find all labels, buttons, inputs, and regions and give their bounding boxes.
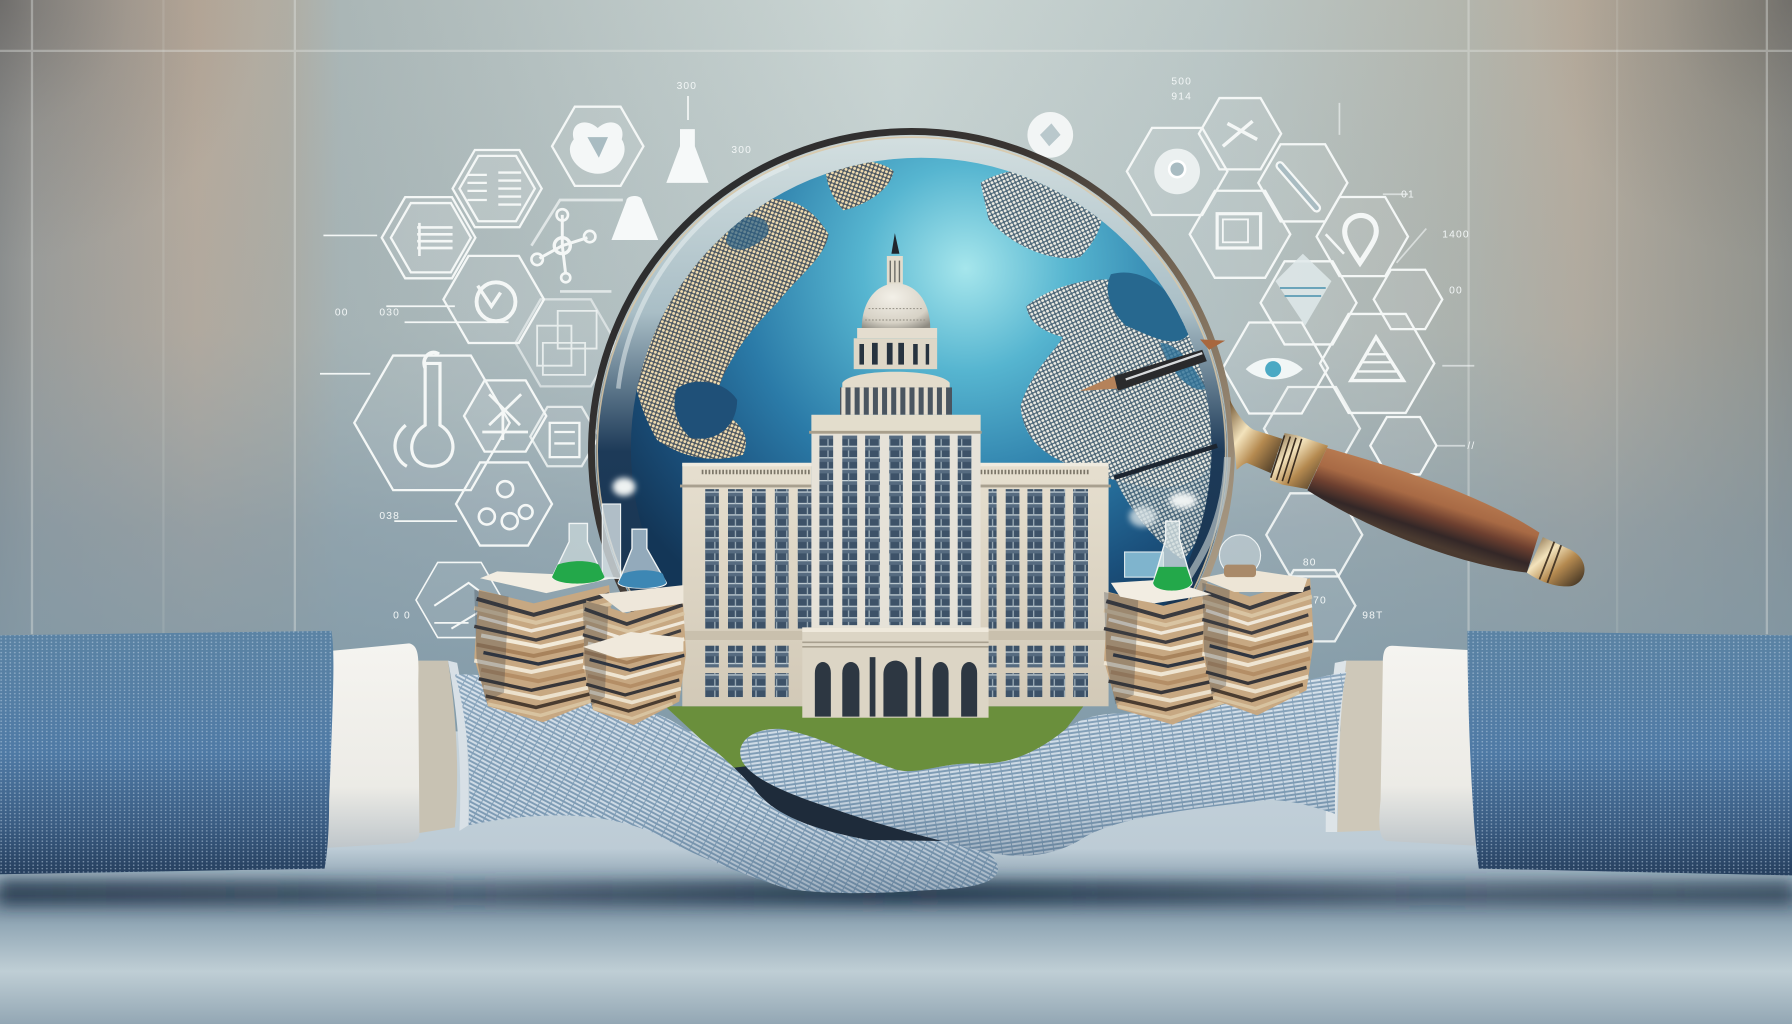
left lab glassware bbox=[552, 478, 666, 588]
hexagon: lower left bbox=[416, 562, 503, 638]
connector lines and labels right: 80 bbox=[1303, 558, 1317, 569]
hexagon: molecule cluster icon bbox=[456, 462, 552, 546]
hexagon: funnel icon bbox=[1261, 254, 1357, 344]
connector lines and labels right bbox=[1171, 77, 1475, 621]
dark gap between hands bbox=[731, 754, 1006, 857]
connector lines and labels right: 970 bbox=[1306, 595, 1327, 606]
smoke bbox=[1169, 493, 1197, 509]
hexagon: gauge icon bbox=[443, 256, 544, 343]
left paper stacks bbox=[474, 571, 686, 725]
gold neck bbox=[1230, 400, 1282, 473]
icon: white round badge bbox=[1027, 112, 1073, 158]
hexagon: upper right small bbox=[1374, 270, 1442, 329]
green flask bbox=[552, 523, 605, 584]
sea patch west bbox=[674, 382, 737, 439]
right hexagon icon network bbox=[1027, 77, 1475, 641]
left gloved hand bbox=[455, 674, 998, 893]
top sheets bbox=[1111, 579, 1211, 603]
land: north nub bbox=[825, 160, 894, 210]
connector lines and labels left: 00 bbox=[335, 307, 349, 318]
connector lines and labels left: 038 bbox=[379, 511, 400, 522]
hexagon: large flask outline bbox=[354, 352, 510, 490]
blue photo card bbox=[1125, 552, 1163, 577]
land: west continent bbox=[632, 199, 829, 459]
lawn bbox=[665, 706, 1083, 789]
right paper stacks bbox=[1104, 569, 1314, 725]
connector lines and labels right: // bbox=[1467, 441, 1475, 452]
magnifying glass bbox=[588, 128, 1235, 612]
blue sleeve bbox=[0, 631, 333, 874]
capitol-style building bbox=[680, 233, 1111, 718]
top sheets bbox=[480, 571, 617, 593]
dome bbox=[840, 233, 952, 415]
white cuff bbox=[1379, 646, 1477, 846]
hexagon: lower right small bbox=[1370, 417, 1437, 474]
right gloved hand bbox=[740, 672, 1346, 856]
connector lines and labels left: 0 0 bbox=[393, 610, 411, 621]
magnifier handle bbox=[1230, 400, 1585, 586]
inner beige cuff bbox=[409, 661, 457, 834]
glove cuff edge bbox=[1326, 661, 1346, 832]
central tower bbox=[809, 415, 982, 627]
hexagon: monitor icon bbox=[1190, 191, 1290, 278]
right lab glassware bbox=[1125, 493, 1261, 591]
hexagon: pyramid icon bbox=[1320, 314, 1434, 413]
connector lines and labels right: 914 bbox=[1171, 91, 1192, 102]
land: east continent bbox=[1021, 279, 1215, 487]
land: south east bbox=[1111, 451, 1214, 560]
hexagon: crossbones icon bbox=[464, 380, 546, 452]
globe bbox=[631, 158, 1212, 606]
lens with globe bbox=[588, 128, 1235, 612]
connector lines and labels right: 01 bbox=[1401, 190, 1415, 201]
white cuff bbox=[325, 643, 419, 848]
hexagon: capsule icon bbox=[1258, 144, 1347, 221]
hexagon: location pin icon bbox=[1317, 197, 1408, 276]
right wing bbox=[979, 463, 1111, 706]
hexagon: list icon bbox=[382, 197, 475, 278]
entrance block bbox=[802, 627, 989, 718]
connector lines and labels right: 1400 bbox=[1442, 230, 1470, 241]
hexagons: behind handle bbox=[1264, 387, 1362, 641]
end cap bbox=[1527, 537, 1585, 586]
hexagon: eye icon bbox=[1223, 322, 1328, 414]
test tube bbox=[602, 504, 621, 578]
wooden grip bbox=[1307, 448, 1539, 573]
right shirt cuff and sleeve bbox=[1326, 631, 1792, 875]
lens rim bbox=[588, 128, 1235, 612]
hexagon: gear icon bbox=[1127, 128, 1227, 215]
connector lines and labels left: 300 bbox=[677, 81, 697, 92]
sea patch east bbox=[1108, 272, 1191, 341]
hexagon: document icon bbox=[453, 150, 542, 227]
molecule icon bbox=[531, 200, 623, 291]
connector lines and labels right: 500 bbox=[1171, 77, 1192, 88]
icon: bell flask bbox=[611, 196, 658, 240]
hexagon: faint buildings bbox=[515, 299, 616, 386]
green flask bbox=[1153, 521, 1192, 591]
floor bbox=[0, 731, 1792, 1024]
hexagon: tools icon bbox=[1199, 98, 1281, 169]
inner beige cuff bbox=[1337, 661, 1397, 832]
connector lines and labels right: 00 bbox=[1449, 286, 1463, 297]
left hexagon icon network bbox=[320, 81, 752, 638]
hexagon: calculator icon bbox=[530, 407, 599, 466]
glove cuff edge bbox=[448, 661, 469, 831]
land: north east bbox=[981, 169, 1102, 258]
knurled collar bbox=[1270, 433, 1328, 489]
connector lines and labels left bbox=[320, 81, 752, 623]
left shirt cuff and sleeve bbox=[0, 631, 469, 874]
hexagon: clover icon bbox=[552, 107, 643, 186]
left wing bbox=[680, 463, 811, 706]
connector lines and labels left: 030 bbox=[379, 307, 400, 318]
round jar bbox=[1219, 535, 1261, 577]
icon: white flask bbox=[666, 129, 709, 183]
connector lines and labels left: 300 bbox=[731, 145, 752, 156]
connector lines and labels right: 98T bbox=[1362, 610, 1383, 621]
blue flask bbox=[618, 529, 666, 588]
blue sleeve bbox=[1467, 631, 1792, 875]
smoke bbox=[613, 478, 635, 496]
reflected pen lines bbox=[1080, 339, 1225, 478]
